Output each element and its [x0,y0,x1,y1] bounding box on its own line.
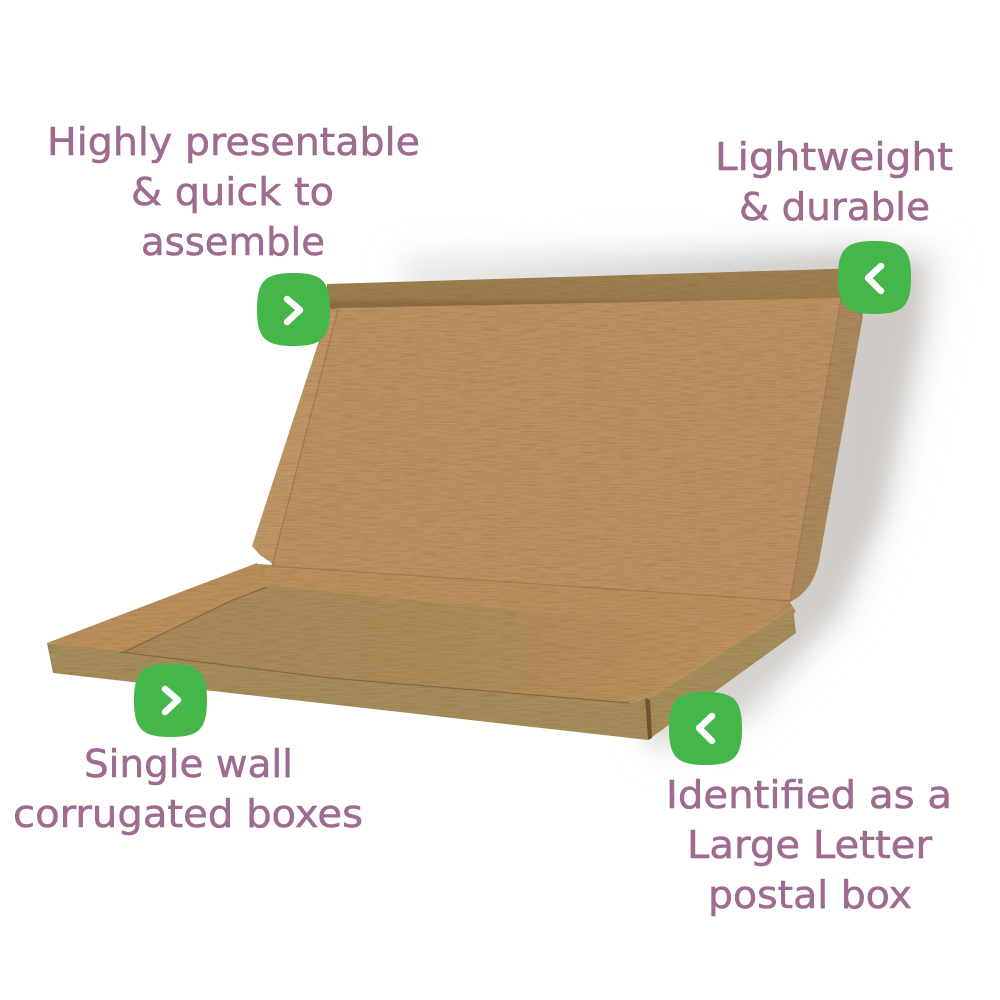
label: highly presentable: assemble [141,220,325,264]
chevron right [287,299,300,322]
box lid: left side flap [252,308,338,564]
left base flap [47,563,267,654]
label: lightweight and durable [715,135,953,229]
chevron right [165,689,178,712]
label: identified as large letter: Large Letter [687,823,932,867]
label: lightweight and durable: & durable [739,185,930,229]
front wall top edge [120,652,630,703]
label: identified as large letter [666,773,952,917]
cardboard box [47,268,865,740]
box lid: right side flap [785,299,863,602]
corner fold [645,698,652,740]
box lid: main inner panel [272,298,841,602]
label: highly presentable: Highly presentable [47,120,420,164]
label: highly presentable: & quick to [131,170,334,214]
label: single wall corrugated: corrugated boxes [13,792,363,836]
front wall [47,643,648,740]
label: single wall corrugated [13,742,363,836]
button: bottom right [669,692,742,765]
label: lightweight and durable: Lightweight [715,135,953,179]
hinge strip [262,565,790,634]
right wall [645,607,796,740]
chevron left [868,266,881,291]
box lid: top flap [327,268,865,318]
label: identified as large letter: postal box [708,873,912,917]
label: highly presentable [47,120,420,264]
left flap crease shadow [120,587,267,654]
label: identified as large letter: Identified as a [666,773,952,817]
left flap crease [272,309,338,566]
hinge crease line [272,566,790,601]
chevron left [699,716,712,741]
base floor panel [120,586,754,703]
right flap crease [790,299,841,601]
drop shadow behind box [395,240,945,755]
label: single wall corrugated: Single wall [84,742,293,786]
backing fill [120,564,796,698]
button: top left [257,273,330,346]
button: bottom left [134,664,207,737]
right wall top edge [648,607,793,698]
button: top right [838,241,911,314]
